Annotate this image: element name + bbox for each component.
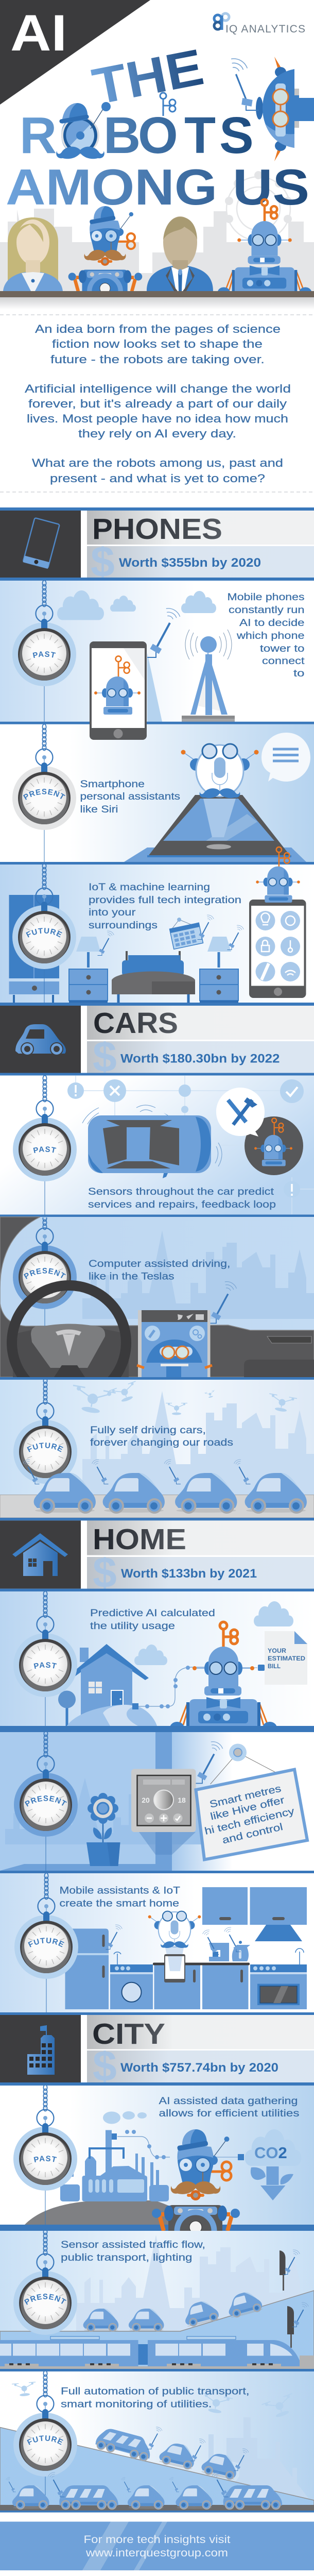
counter and cabinets — [153, 1963, 250, 2009]
intro text — [25, 323, 291, 485]
watch: city past — [13, 2086, 77, 2225]
intro text: Artificial intelligence will change the world — [25, 382, 291, 395]
header: CARS: $ — [93, 1032, 117, 1081]
robot: hat robot at factory — [152, 2129, 240, 2249]
text: iot and machine learning: IoT & machine learning — [89, 882, 210, 893]
antenna — [195, 1742, 223, 1783]
robot: bill robot — [170, 1622, 277, 1728]
watch: home present: PRESENT — [25, 1795, 67, 1807]
text: computer assisted: Computer assisted driving, — [89, 1258, 231, 1269]
watch: city past: PAST — [34, 2156, 57, 2163]
CO2 cloud: CO2 — [254, 2144, 287, 2162]
footer text: www.interquestgroup.com — [85, 2547, 228, 2559]
footer text: For more tech insights visit — [83, 2534, 231, 2546]
intro text: What are the robots among us, past and — [32, 456, 283, 469]
watch: phones future — [12, 865, 76, 1003]
intro text: fiction now looks set to shape the — [52, 337, 263, 350]
intro text: An idea born from the pages of science — [35, 323, 281, 335]
panel: cars future — [0, 1380, 314, 1518]
title line: ROBOTS: ROBOTS — [20, 107, 254, 164]
text: mobile assistants — [60, 1885, 180, 1909]
antenna — [209, 1282, 237, 1323]
intro text: future - the robots are taking over. — [50, 353, 265, 366]
text: predictive AI — [90, 1607, 215, 1632]
dashboard — [0, 1217, 314, 1377]
corner banner heading: AI: AI — [10, 4, 67, 61]
watch: cars present: PRESENT — [24, 1268, 66, 1279]
hive thermostat — [131, 1769, 196, 1832]
text: smartphone: Smartphone — [80, 778, 145, 790]
text: sensor assisted — [61, 2239, 205, 2263]
text: computer assisted: like in the Teslas — [89, 1270, 175, 1282]
wardrobe — [9, 895, 59, 1003]
cooker — [250, 1948, 307, 2009]
robot: mic assistant — [181, 744, 258, 798]
estimated bill — [265, 1631, 307, 1685]
desk — [0, 291, 314, 297]
text: AI assisted: AI assisted data gathering — [159, 2095, 298, 2107]
hive thermostat: 20 — [142, 1796, 150, 1804]
panel: phones future — [0, 847, 314, 1003]
text: mobile phones: to — [293, 668, 305, 679]
panel: city future — [0, 2371, 314, 2511]
text: fully self driving: Fully self driving cars, — [90, 1425, 206, 1436]
text: full automation — [61, 2386, 249, 2410]
panel: city present — [0, 2231, 314, 2369]
arrow down and leaves — [251, 2166, 293, 2200]
icon: robot O with bowler hat — [56, 102, 111, 159]
text: predictive AI: Predictive AI calculated — [90, 1607, 215, 1619]
data wire — [117, 2130, 244, 2160]
text: smartphone: like Siri — [80, 804, 118, 815]
phone on past panel — [90, 608, 180, 740]
text: fully self driving — [90, 1425, 233, 1448]
estimated bill: BILL — [268, 1664, 281, 1670]
header: CITY — [0, 2012, 314, 2090]
clouds — [134, 1601, 293, 1665]
text: iot and machine learning: into your — [89, 907, 136, 918]
icon: robot badge — [245, 1116, 303, 1175]
upper cabinets — [202, 1887, 307, 1925]
bottom vehicle row — [6, 2472, 282, 2510]
calendar — [168, 914, 203, 949]
cooker hood — [255, 1925, 302, 1941]
text: iot and machine learning: surroundings — [89, 920, 158, 931]
watch: home present — [14, 1732, 78, 1871]
person: man — [147, 216, 213, 291]
watch: city future — [13, 2371, 77, 2496]
text: AI assisted — [159, 2095, 300, 2119]
city skyline — [82, 1391, 314, 1480]
speech bubble — [261, 733, 310, 782]
data wire — [132, 1665, 265, 1709]
logo: IQ Analytics: IQ ANALYTICS — [225, 23, 305, 35]
text: smartphone: personal assistants — [80, 791, 180, 802]
panel: cars present — [0, 1217, 314, 1377]
panel: phones past — [0, 581, 314, 722]
factory — [60, 2130, 169, 2201]
text: smartphone — [80, 778, 180, 815]
phone tower — [182, 630, 235, 722]
panel: cars past — [0, 1076, 314, 1215]
center console screen — [137, 1310, 212, 1377]
footer band — [0, 2521, 314, 2570]
bed — [112, 951, 195, 1003]
panel: home future — [0, 1873, 314, 2012]
title line: THE: THE — [88, 38, 208, 115]
sensor network — [67, 1076, 314, 1214]
tablet — [124, 795, 306, 862]
header: HOME: $ — [93, 1548, 117, 1597]
thermostat shadow — [139, 1832, 196, 1855]
house — [58, 1644, 157, 1726]
drones — [69, 1381, 297, 1416]
header: CITY: CITY — [92, 2018, 165, 2050]
glove box — [244, 1360, 314, 1377]
watch: home future: FUTURE — [28, 1938, 64, 1947]
icon: wind-up key on title — [160, 93, 176, 116]
text: iot and machine learning — [89, 882, 241, 931]
intro text: forever, but it's already a part of our daily — [28, 397, 287, 410]
person: woman — [3, 217, 63, 291]
watch: cars present — [13, 1217, 77, 1326]
faint factory — [208, 2417, 309, 2499]
robot: key robot over phone — [256, 847, 300, 903]
smoke — [103, 2111, 147, 2124]
estimated bill: YOUR — [268, 1648, 287, 1654]
intro text: lives. Most people have no idea how much — [27, 412, 288, 425]
robot: glasses robot at desk — [217, 199, 312, 293]
desk shadow — [0, 297, 314, 310]
hanging sign: Smart metres — [208, 1783, 283, 1810]
city skyline — [82, 1230, 314, 1319]
wall pillar — [155, 1732, 172, 1871]
panel: home past — [0, 1591, 314, 1728]
watch: phones future: FUTURE — [26, 928, 62, 938]
watch: cars future — [13, 1380, 77, 1484]
drones — [12, 2382, 299, 2421]
watch: home future — [14, 1873, 78, 2012]
watch: phones past: PAST — [33, 651, 56, 658]
thick rule — [0, 2225, 314, 2231]
text: mobile phones: tower to — [260, 643, 305, 654]
intro text: present - and what is yet to come? — [50, 472, 265, 485]
header: PHONES: PHONES — [92, 513, 222, 546]
skyline — [76, 2235, 308, 2324]
hanging sign — [196, 1743, 307, 1860]
hill — [25, 2200, 196, 2225]
panel: home present — [0, 1732, 314, 1871]
speech bubble: tools — [216, 1088, 265, 1137]
clouds — [57, 590, 216, 620]
right lamp and night stand — [200, 937, 238, 1003]
header: HOME — [0, 1518, 314, 1597]
header: PHONES: Worth $355bn by 2020 — [119, 556, 261, 570]
hero: grey city skyline — [0, 171, 314, 291]
text: sensors: Sensors throughout the car predict — [88, 1186, 274, 1197]
small antennas — [98, 915, 243, 955]
text: sensors: services and repairs, feedback loop — [88, 1199, 276, 1210]
watch: city future: FUTURE — [27, 2435, 63, 2445]
text: full automation: Full automation of public transport, — [61, 2386, 249, 2397]
train — [0, 2336, 314, 2369]
watch: cars past — [13, 1076, 77, 1215]
CO2 cloud — [245, 2129, 302, 2166]
watch: cars past: PAST — [33, 1146, 57, 1153]
second traffic light — [287, 2302, 308, 2348]
watch: city present — [13, 2231, 77, 2335]
title line: AMONG US: AMONG US — [6, 159, 309, 215]
vehicles on slope — [94, 2426, 249, 2481]
footer text — [83, 2534, 231, 2559]
panel: phones present — [0, 724, 314, 862]
smart phone control screen — [249, 900, 306, 998]
hanging sign: and control — [221, 1821, 284, 1846]
watch: phones past — [12, 581, 76, 722]
fridge — [65, 1925, 122, 2009]
pale city through window — [5, 1778, 237, 1844]
watch: cars future: FUTURE — [27, 1443, 63, 1452]
watch: home past — [14, 1591, 77, 1726]
text: full automation: smart monitoring of utilities. — [61, 2399, 212, 2410]
header: HOME: HOME — [93, 1523, 186, 1556]
text: mobile phones: constantly run — [229, 604, 305, 616]
intro text: they rely on AI every day. — [78, 427, 236, 440]
header: HOME: Worth $133bn by 2021 — [121, 1567, 257, 1581]
hive thermostat: 18 — [178, 1796, 186, 1804]
car top view — [82, 1105, 222, 1178]
text: sensor assisted: public transport, lighting — [61, 2252, 193, 2263]
estimated bill: ESTIMATED — [268, 1656, 305, 1662]
hanging sign: hi tech efficiency — [203, 1805, 295, 1837]
road — [0, 1495, 314, 1518]
tower beam — [147, 653, 162, 722]
traffic light — [280, 2250, 300, 2291]
corner banner — [0, 0, 150, 105]
header: CITY: Worth $757.74bn by 2020 — [120, 2061, 278, 2075]
text: predictive AI: the utility usage — [90, 1620, 175, 1632]
logo: IQ Analytics — [214, 13, 305, 35]
window — [0, 1732, 155, 1871]
header: CARS — [0, 1003, 314, 1081]
self-driving cars — [23, 1460, 307, 1514]
header: PHONES — [0, 507, 314, 586]
header: CARS: Worth $180.30bn by 2022 — [120, 1052, 280, 1065]
mic beam and phone — [164, 1942, 185, 1982]
road ramp — [0, 2291, 314, 2369]
header: PHONES: $ — [91, 537, 115, 586]
text: iot and machine learning: provides full tech integration — [89, 894, 241, 906]
coffee machine and kettle — [203, 1927, 250, 1961]
washing machine — [110, 1952, 153, 2009]
text: fully self driving: forever changing our roads — [90, 1437, 233, 1448]
text: mobile assistants: Mobile assistants & IoT — [60, 1885, 180, 1896]
robot: hat robot at desk — [68, 206, 142, 307]
watch: city present: PRESENT — [24, 2294, 66, 2305]
left lamp and night stand — [69, 937, 108, 1003]
watch: phones present — [12, 724, 76, 862]
plant — [86, 1793, 120, 1866]
watch: phones present: PRESENT — [23, 789, 65, 800]
text: AI assisted: allows for efficient utilities — [159, 2108, 300, 2119]
icon: flying disc robot — [231, 57, 314, 161]
text: mobile phones: AI to decide — [239, 617, 305, 629]
text: mobile assistants: create the smart home — [60, 1898, 179, 1909]
road — [0, 2505, 314, 2511]
steering wheel — [12, 1285, 129, 1400]
header: CARS: CARS — [93, 1007, 178, 1040]
robot: mic assistant — [148, 1911, 201, 1948]
blue rules — [0, 723, 314, 863]
text: mobile phones: connect — [262, 655, 305, 667]
panel: city past — [0, 2086, 314, 2225]
shelf — [0, 1864, 155, 1871]
text: computer assisted — [89, 1258, 231, 1282]
hanging sign: like Hive offer — [210, 1794, 286, 1822]
text: sensors — [88, 1186, 276, 1210]
watch: home past: PAST — [34, 1662, 57, 1669]
cars on the road — [83, 2289, 264, 2332]
text: sensor assisted: Sensor assisted traffic flow, — [61, 2239, 205, 2250]
text: mobile phones — [228, 591, 305, 679]
text: mobile phones: Mobile phones — [228, 591, 305, 603]
text: mobile phones: which phone — [236, 630, 305, 641]
vent — [267, 1336, 311, 1343]
header: CITY: $ — [93, 2042, 117, 2090]
slope — [0, 2428, 314, 2511]
